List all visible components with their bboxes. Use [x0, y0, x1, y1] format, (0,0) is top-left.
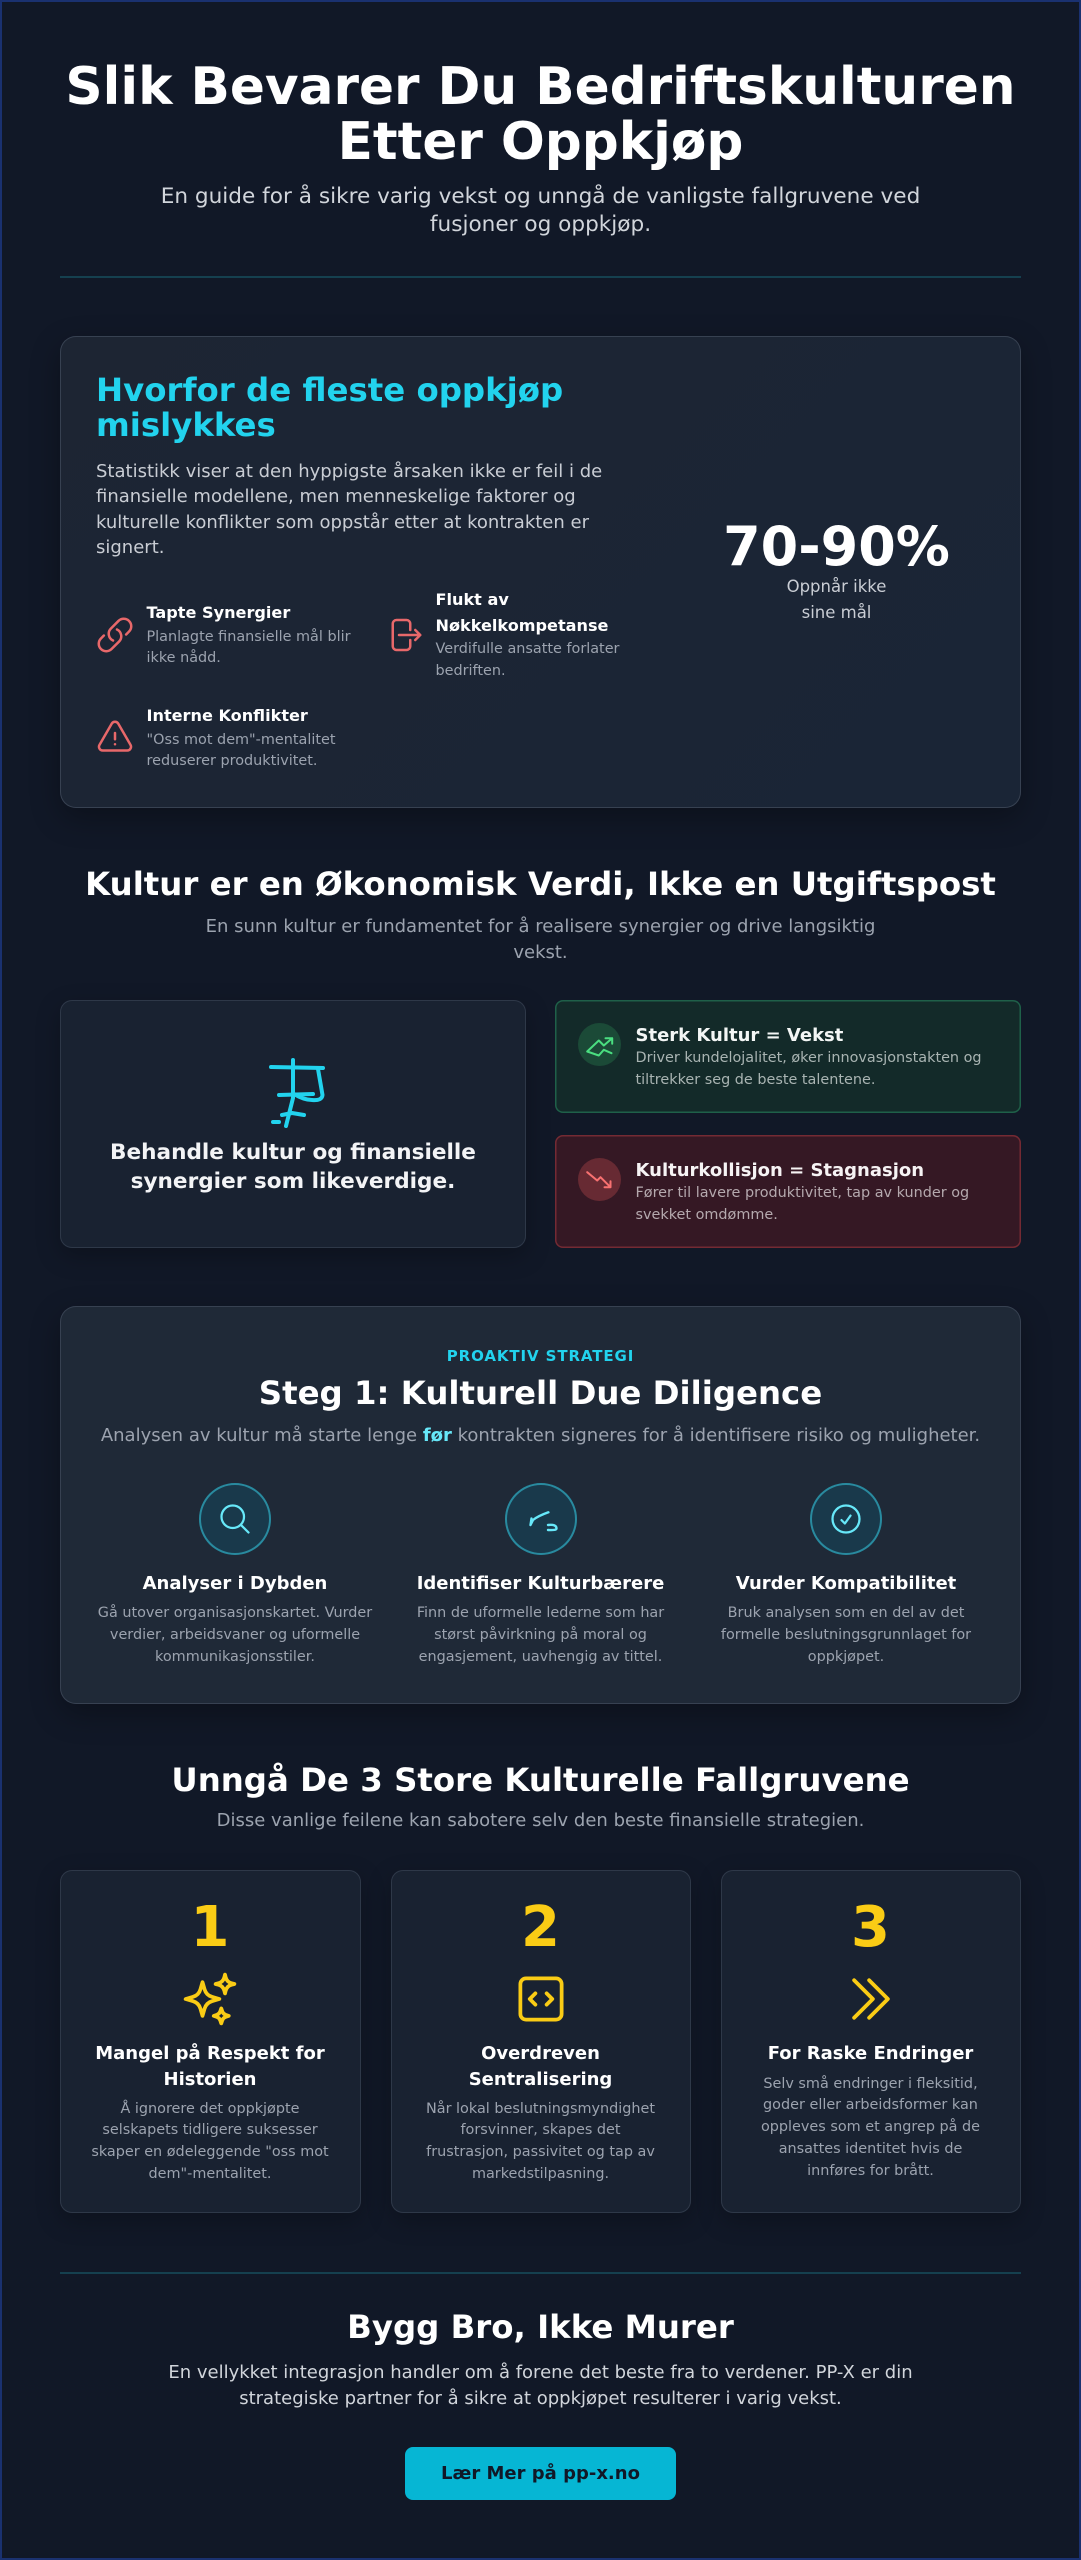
- card text: [426, 2100, 655, 2182]
- item text: [436, 590, 620, 679]
- intro text: [96, 461, 602, 558]
- card title: Sentralisering: [469, 2069, 612, 2090]
- icon: code square: [518, 1976, 564, 2022]
- card: pitfall 1: [60, 1870, 360, 2213]
- intro text: kulturelle konflikter som oppstår etter at kontrakten er: [96, 512, 589, 533]
- panel: why acquisitions fail: [60, 336, 1021, 808]
- step text: [417, 1605, 664, 1665]
- step text: Finn de uformelle lederne som har: [417, 1605, 664, 1621]
- step title: Vurder Kompatibilitet: [736, 1572, 956, 1594]
- heading: Steg 1: Kulturell Due Diligence: [259, 1374, 822, 1412]
- stat caption: Oppnår ikke: [787, 577, 886, 596]
- card title: Mangel på Respekt for: [95, 2043, 325, 2064]
- item: loss of key talent: [392, 590, 620, 679]
- stat number: 70-90%: [723, 515, 950, 578]
- subtitle: fusjoner og oppkjøp.: [430, 212, 651, 237]
- step text: størst påvirkning på moral og: [434, 1627, 647, 1643]
- card: strong culture: [555, 1000, 1021, 1113]
- item: internal conflicts: [98, 706, 336, 769]
- card: pitfall 3: [720, 1870, 1021, 2213]
- heading: mislykkes: [96, 406, 276, 444]
- card text: goder eller arbeidsformer kan: [763, 2097, 978, 2113]
- icon: sparkles: [184, 1972, 236, 2026]
- card text: selskapets tidligere suksesser: [102, 2122, 318, 2138]
- item text: ikke nådd.: [146, 650, 221, 666]
- card text: Selv små endringer i fleksitid,: [763, 2076, 978, 2092]
- button: Lær Mer på pp-x.no: [441, 2463, 640, 2484]
- step title: Analyser i Dybden: [143, 1572, 327, 1594]
- panel: balance message: [60, 1000, 526, 1248]
- header: [65, 57, 1016, 237]
- subtitle: En guide for å sikre varig vekst og unngå de vanligste fallgruvene ved: [161, 184, 920, 209]
- item text: Tapte Synergier: [146, 603, 290, 622]
- title: [65, 57, 1016, 172]
- item text: Verdifulle ansatte forlater: [436, 641, 619, 657]
- card text: Driver kundelojalitet, øker innovasjonstakten og: [636, 1050, 982, 1066]
- icon: magnifier: [199, 1483, 271, 1555]
- section heading: pitfalls: [171, 1761, 910, 1831]
- card text: [91, 2100, 329, 2182]
- step text: formelle beslutningsgrunnlaget for: [721, 1627, 971, 1643]
- card text: markedstilpasning.: [472, 2166, 609, 2182]
- subheading: Analysen av kultur må starte lenge før kontrakten signeres for å identifisere risiko og muligheter.: [101, 1425, 980, 1446]
- number: 3: [851, 1895, 890, 1960]
- stat caption: [787, 577, 886, 622]
- stat caption: sine mål: [802, 603, 871, 622]
- step text: [721, 1605, 972, 1665]
- card text: [636, 1050, 982, 1088]
- closing section: [168, 2308, 913, 2500]
- card text: [636, 1185, 969, 1223]
- card text: frustrasjon, passivitet og tap av: [426, 2144, 655, 2160]
- card text: Når lokal beslutningsmyndighet: [426, 2100, 655, 2116]
- card text: forsvinner, skapes det: [460, 2122, 621, 2138]
- step title: Identifiser Kulturbærere: [417, 1572, 664, 1594]
- item text: Planlagte finansielle mål blir: [146, 629, 350, 645]
- message text: [110, 1140, 476, 1194]
- icon: link: [98, 618, 132, 652]
- card title: Overdreven: [481, 2043, 600, 2064]
- item text: [146, 603, 351, 666]
- item text: "Oss mot dem"-mentalitet: [146, 732, 335, 748]
- step: compatibility: [721, 1483, 972, 1665]
- heading: Bygg Bro, Ikke Murer: [347, 2308, 734, 2346]
- card title: [469, 2043, 612, 2090]
- stat callout: [723, 515, 950, 622]
- closing text: [168, 2362, 913, 2409]
- card: pitfall 2: [390, 1870, 690, 2213]
- subtitle: [161, 184, 920, 237]
- title: Slik Bevarer Du Bedriftskulturen: [65, 57, 1016, 117]
- button: [405, 2447, 676, 2500]
- icon: trending down: [578, 1158, 620, 1200]
- subheading: [206, 916, 875, 963]
- icon: broken glyph: [504, 1483, 576, 1555]
- item text: reduserer produktivitet.: [146, 753, 318, 769]
- card text: innføres for brått.: [807, 2163, 934, 2179]
- number: 2: [521, 1895, 560, 1960]
- card: culture clash: [555, 1135, 1021, 1248]
- section heading: economic value: [85, 865, 996, 963]
- message text: Behandle kultur og finansielle: [110, 1140, 476, 1164]
- intro text: finansielle modellene, men menneskelige faktorer og: [96, 486, 576, 507]
- item text: bedriften.: [436, 663, 506, 679]
- message text: synergier som likeverdige.: [131, 1169, 455, 1194]
- heading: Unngå De 3 Store Kulturelle Fallgruvene: [171, 1761, 910, 1799]
- step text: Bruk analysen som en del av det: [728, 1605, 964, 1621]
- item text: Interne Konflikter: [146, 706, 308, 725]
- item text: Flukt av: [436, 590, 509, 609]
- card title: Historien: [164, 2069, 256, 2090]
- card text: tiltrekker seg de beste talentene.: [636, 1072, 875, 1088]
- card text: oppleves som et angrep på de: [761, 2119, 980, 2135]
- icon: exit arrow: [392, 618, 422, 652]
- icon: double chevron: [852, 1978, 890, 2020]
- card text: Å ignorere det oppkjøpte: [120, 2100, 300, 2116]
- card text: Fører til lavere produktivitet, tap av kunder og: [636, 1185, 969, 1201]
- subheading: En sunn kultur er fundamentet for å realisere synergier og drive langsiktig: [206, 916, 875, 937]
- card title: [95, 2043, 325, 2090]
- icon: trending up: [578, 1022, 620, 1066]
- heading: [96, 371, 563, 444]
- intro text: Statistikk viser at den hyppigste årsaken ikke er feil i de: [96, 461, 602, 482]
- card title: For Raske Endringer: [768, 2043, 973, 2064]
- intro text: signert.: [96, 537, 164, 558]
- icon: warning triangle: [98, 720, 132, 752]
- subheading: vekst.: [513, 942, 568, 963]
- step text: verdier, arbeidsvaner og uformelle: [110, 1627, 360, 1643]
- icon: check circle: [810, 1483, 882, 1555]
- item text: Nøkkelkompetanse: [436, 616, 608, 635]
- panel: cultural due diligence: [60, 1306, 1021, 1704]
- heading: Kultur er en Økonomisk Verdi, Ikke en Utgiftspost: [85, 865, 996, 903]
- subheading: Disse vanlige feilene kan sabotere selv den beste finansielle strategien.: [217, 1810, 864, 1831]
- step: culture carriers: [417, 1483, 664, 1665]
- step text: engasjement, uavhengig av tittel.: [419, 1649, 662, 1665]
- number: 1: [191, 1895, 229, 1960]
- card text: skaper en ødeleggende "oss mot: [91, 2144, 329, 2160]
- step text: [98, 1604, 372, 1665]
- closing text: strategiske partner for å sikre at oppkjøpet resulterer i varig vekst.: [239, 2388, 842, 2409]
- card text: dem"-mentalitet.: [148, 2166, 271, 2182]
- card title: Kulturkollisjon = Stagnasjon: [636, 1160, 924, 1181]
- step: analyse: [98, 1483, 372, 1665]
- heading: Hvorfor de fleste oppkjøp: [96, 371, 563, 409]
- item text: [146, 706, 336, 769]
- card title: Sterk Kultur = Vekst: [636, 1025, 843, 1046]
- icon: scales: [269, 1058, 325, 1128]
- item: lost synergies: [98, 603, 351, 666]
- eyebrow: PROAKTIV STRATEGI: [447, 1347, 634, 1365]
- step text: kommunikasjonsstiler.: [155, 1649, 315, 1665]
- card text: svekket omdømme.: [636, 1207, 778, 1223]
- step text: Gå utover organisasjonskartet. Vurder: [98, 1605, 372, 1621]
- card text: [761, 2075, 980, 2179]
- step text: oppkjøpet.: [808, 1649, 884, 1665]
- card text: ansattes identitet hvis de: [779, 2141, 962, 2157]
- title: Etter Oppkjøp: [338, 112, 743, 172]
- closing text: En vellykket integrasjon handler om å forene det beste fra to verdener. PP-X er din: [168, 2362, 913, 2383]
